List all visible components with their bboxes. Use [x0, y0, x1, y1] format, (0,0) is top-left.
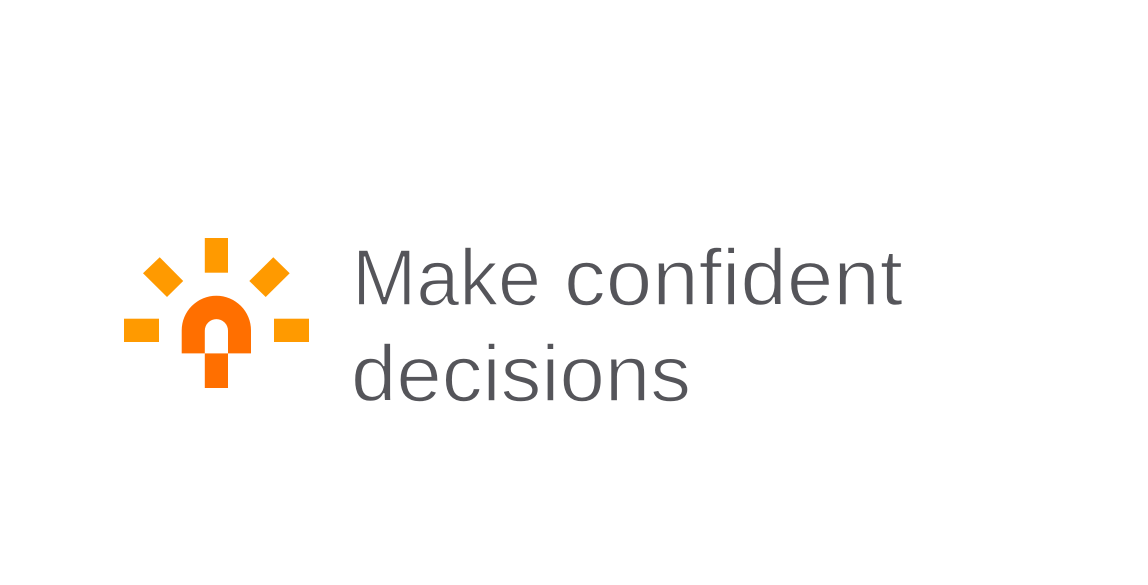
- icon: left ray: [124, 319, 159, 342]
- icon: top ray: [205, 238, 228, 273]
- icon: upper right ray: [249, 257, 290, 297]
- title line 1: confident: [564, 233, 903, 322]
- title line 1: [352, 233, 903, 322]
- title line 1: Make: [352, 233, 541, 322]
- icon: orange bulb stem: [205, 353, 228, 388]
- title line 2: decisions: [351, 329, 691, 418]
- icon: upper left ray: [143, 257, 183, 297]
- icon: right ray: [274, 319, 309, 342]
- icon: orange bulb arch: [182, 296, 251, 353]
- title text: [351, 233, 903, 418]
- icon: lightbulb with rays: [124, 238, 309, 388]
